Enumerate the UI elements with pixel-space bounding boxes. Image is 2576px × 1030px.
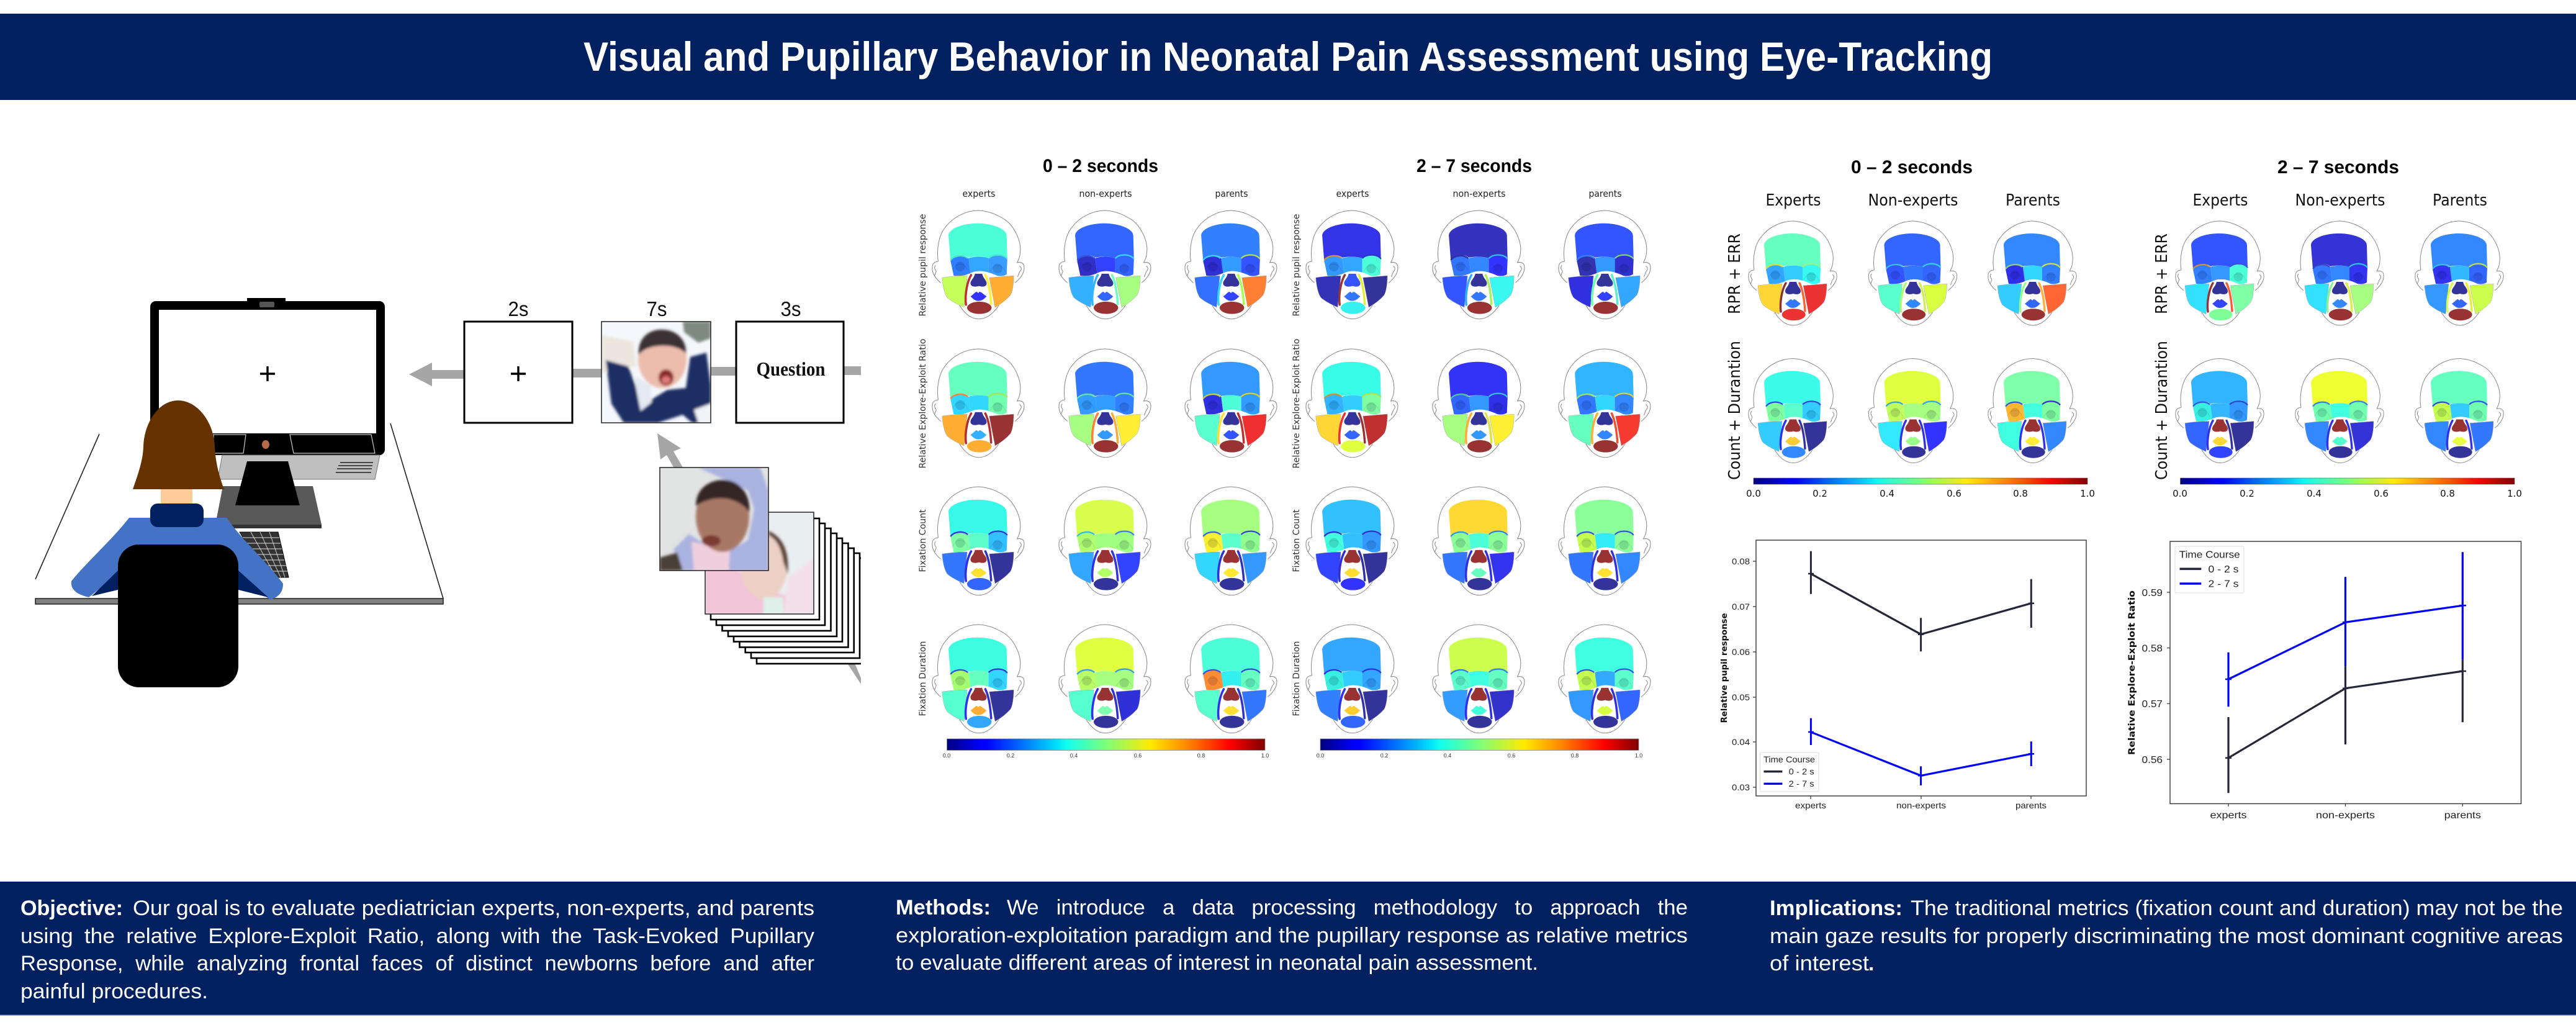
- x tick labels: [1795, 800, 2047, 810]
- legend: [2175, 546, 2244, 593]
- row labels: Relative pupil response: [1292, 214, 1302, 317]
- colorbar: [2173, 478, 2522, 499]
- title banner: Visual and Pupillary Behavior in Neonatal Pain Assessment using Eye-Tracking: [583, 34, 1993, 79]
- colorbar: 0.0: [1746, 488, 1761, 499]
- heading: 2 – 7 seconds: [1416, 156, 1532, 176]
- row labels: [1292, 214, 1302, 716]
- text block: objective: painful procedures.: [20, 980, 208, 1003]
- colorbar: 0.4: [1070, 752, 1078, 759]
- face: experts fixation duration: [1306, 625, 1398, 733]
- x tick labels: [2210, 810, 2481, 821]
- colorbar: 0.6: [1947, 488, 1961, 499]
- x tick labels: parents: [2444, 810, 2481, 821]
- y axis label: Relative pupil response: [1720, 613, 1729, 723]
- keyboard: [240, 532, 289, 577]
- row labels: RPR + ERR: [1726, 233, 1744, 314]
- column labels: parents: [1215, 188, 1248, 199]
- legend: [1760, 752, 1819, 792]
- text block: objective: Our goal is to evaluate pediatrician experts, non-experts, and parents: [133, 897, 814, 920]
- face: parents fixation duration: [1185, 625, 1277, 733]
- row labels: Count + Durantion: [2153, 341, 2171, 480]
- colorbar: 0.6: [2374, 488, 2389, 499]
- row labels: [918, 214, 928, 716]
- timeline box: 2s fixation: 2s: [508, 297, 529, 320]
- row labels: Relative pupil response: [918, 214, 928, 317]
- panel: stimulus timeline: [409, 297, 865, 684]
- image stack of newborn photographs: [660, 468, 865, 664]
- column labels: Parents: [2433, 191, 2487, 210]
- column labels: Experts: [2192, 191, 2248, 210]
- y axis label: Relative Explore-Exploit Ratio: [2127, 590, 2137, 755]
- panel: eye-tracking experimental setup: [35, 298, 443, 687]
- panel: AOI heatmaps 2-7 seconds (all metrics): [1292, 156, 1651, 759]
- title banner: [0, 14, 2576, 100]
- column labels: non-experts: [1079, 188, 1132, 199]
- face: experts count+duration: [2176, 359, 2264, 463]
- colorbar: 0.2: [1813, 488, 1827, 499]
- face: parents fixation duration: [1559, 625, 1651, 733]
- y ticks: 0.58: [2141, 643, 2163, 654]
- face: non-experts fixation count: [1059, 487, 1151, 595]
- face: experts count+duration: [1749, 359, 1837, 463]
- heading: 0 – 2 seconds: [1851, 157, 1973, 178]
- series: 2-7 s: [2225, 552, 2466, 707]
- column labels: [1336, 188, 1622, 199]
- legend: 2 - 7 s: [1789, 779, 1814, 788]
- legend: 2 - 7 s: [2209, 579, 2238, 590]
- text block: objective: Objective:: [20, 897, 123, 920]
- timeline box: 3s question: 3s: [781, 297, 801, 320]
- row labels: Relative Explore-Exploit Ratio: [918, 339, 928, 468]
- face: experts fixation count: [1306, 487, 1398, 595]
- colorbar: [1317, 739, 1642, 759]
- colorbar: 0.4: [1444, 752, 1451, 759]
- row labels: Fixation Duration: [918, 641, 928, 716]
- y ticks: 0.04: [1732, 737, 1750, 747]
- face: experts explore-exploit: [1306, 349, 1398, 458]
- text block: implications: [1770, 897, 2563, 975]
- column labels: experts: [1336, 188, 1369, 199]
- row labels: Fixation Duration: [1292, 641, 1302, 716]
- y ticks: 0.05: [1732, 692, 1750, 702]
- monitor: [150, 298, 385, 528]
- row labels: Relative Explore-Exploit Ratio: [1292, 339, 1302, 468]
- timeline box: 3s question: [736, 297, 844, 423]
- face: non-experts RPR+ERR: [2295, 221, 2384, 325]
- face: experts pupil response: [932, 210, 1024, 319]
- colorbar: 0.2: [1380, 752, 1388, 759]
- y ticks: 0.56: [2141, 755, 2163, 766]
- face: parents fixation count: [1559, 487, 1651, 595]
- text block: methods: [896, 896, 1688, 975]
- column labels: non-experts: [1452, 188, 1506, 199]
- column labels: Non-experts: [2295, 191, 2385, 210]
- text block: methods: exploration-exploitation paradigm and the pupillary response as relative metrics: [896, 924, 1688, 947]
- face: non-experts fixation count: [1433, 487, 1524, 595]
- face: experts fixation duration: [932, 625, 1024, 733]
- text block: objective: [20, 897, 814, 1003]
- colorbar: 0.8: [1571, 752, 1578, 759]
- series: 0-2 s: [2225, 660, 2466, 793]
- x tick labels: non-experts: [1896, 800, 1946, 810]
- column labels: Parents: [2006, 191, 2060, 210]
- colorbar: 0.0: [2173, 488, 2187, 499]
- face: non-experts pupil response: [1433, 210, 1524, 319]
- legend: 0 - 2 s: [1789, 766, 1814, 776]
- colorbar: 0.6: [1508, 752, 1515, 759]
- timeline box: 7s newborn photo: 7s: [647, 297, 667, 320]
- face: parents pupil response: [1559, 210, 1651, 319]
- heading: 0 – 2 seconds: [1043, 156, 1158, 176]
- face: non-experts pupil response: [1059, 210, 1151, 319]
- table: [35, 423, 443, 604]
- colorbar: 0.4: [2307, 488, 2322, 499]
- photo: crying newborn in purple blanket: [660, 468, 768, 571]
- colorbar: 0.0: [943, 752, 950, 759]
- row labels: RPR + ERR: [2153, 233, 2171, 314]
- face: non-experts fixation duration: [1059, 625, 1151, 733]
- face: experts pupil response: [1306, 210, 1398, 319]
- y ticks: 0.59: [2141, 588, 2163, 599]
- text block: objective: Response, while analyzing frontal faces of distinct newborns before and after: [20, 952, 814, 975]
- x tick labels: experts: [2210, 810, 2247, 821]
- colorbar: 1.0: [1635, 752, 1642, 759]
- face: non-experts count+duration: [2295, 359, 2384, 463]
- text block: methods: to evaluate different areas of interest in neonatal pain assessment.: [896, 951, 1538, 975]
- colorbar: 1.0: [2080, 488, 2095, 499]
- colorbar: [943, 739, 1269, 759]
- y ticks: 0.08: [1732, 556, 1750, 566]
- heading: 2 – 7 seconds: [2277, 157, 2399, 178]
- colorbar: 0.8: [2013, 488, 2028, 499]
- column labels: Experts: [1765, 191, 1821, 210]
- colorbar: 0.2: [1007, 752, 1014, 759]
- text block: methods: We introduce a data processing methodology to approach the: [1007, 896, 1688, 919]
- row labels: [1726, 233, 1744, 480]
- face: parents pupil response: [1185, 210, 1277, 319]
- arrow: image stack to stimulus: [657, 433, 861, 684]
- colorbar: [1746, 478, 2095, 499]
- y ticks: 0.03: [1732, 782, 1750, 792]
- text block: implications: main gaze results for properly discriminating the most dominant cognitive areas: [1770, 924, 2563, 948]
- line chart: relative pupil response: [1720, 540, 2086, 810]
- row labels: Fixation Count: [918, 509, 928, 572]
- colorbar: 1.0: [2507, 488, 2522, 499]
- face: experts explore-exploit: [932, 349, 1024, 458]
- column labels: experts: [962, 188, 996, 199]
- colorbar: 0.0: [1317, 752, 1324, 759]
- text block: methods: Methods:: [896, 896, 991, 919]
- legend: 0 - 2 s: [2209, 564, 2238, 575]
- row labels: [2153, 233, 2171, 480]
- colorbar: 0.4: [1880, 488, 1894, 499]
- legend: Time Course: [2179, 550, 2240, 560]
- column labels: [2192, 191, 2487, 210]
- legend: Time Course: [1763, 754, 1815, 764]
- row labels: Fixation Count: [1292, 509, 1302, 572]
- face: parents explore-exploit: [1559, 349, 1651, 458]
- colorbar: 0.6: [1134, 752, 1142, 759]
- face: experts RPR+ERR: [1749, 221, 1837, 325]
- text block: implications: Implications:: [1770, 897, 1903, 920]
- x tick labels: parents: [2015, 800, 2047, 810]
- face: non-experts RPR+ERR: [1868, 221, 1957, 325]
- column labels: Non-experts: [1868, 191, 1958, 210]
- face: parents explore-exploit: [1185, 349, 1277, 458]
- timeline box: 7s newborn photo: [601, 297, 711, 423]
- y ticks: [1732, 556, 2031, 799]
- y ticks: 0.06: [1732, 647, 1750, 657]
- bottom summary band: [0, 882, 2576, 1016]
- text block: implications: The traditional metrics (fixation count and duration) may not be the: [1911, 897, 2563, 920]
- column labels: parents: [1589, 188, 1622, 199]
- face: non-experts explore-exploit: [1059, 349, 1151, 458]
- panel: AOI heatmaps 0-2 seconds (all metrics): [918, 156, 1277, 759]
- series: 0-2 s: [1808, 551, 2034, 651]
- face: parents count+duration: [2415, 359, 2503, 463]
- timeline box: 2s fixation: [464, 297, 572, 423]
- face: non-experts count+duration: [1868, 359, 1957, 463]
- photo: newborn in pink blanket: [705, 512, 814, 614]
- person seen from behind: [71, 400, 283, 687]
- colorbar: 1.0: [1261, 752, 1269, 759]
- face: parents RPR+ERR: [2415, 221, 2503, 325]
- arrow: timeline flowing left: [409, 363, 861, 386]
- column labels: [1765, 191, 2060, 210]
- series: 2-7 s: [1808, 718, 2034, 785]
- text block: objective: using the relative Explore-Exploit Ratio, along with the Task-Evoked Pupillary: [20, 924, 814, 948]
- face: experts fixation count: [932, 487, 1024, 595]
- y ticks: 0.07: [1732, 602, 1750, 612]
- row labels: Count + Durantion: [1726, 341, 1744, 480]
- face: non-experts fixation duration: [1433, 625, 1524, 733]
- y ticks: 0.57: [2141, 699, 2163, 710]
- text block: implications: of interest: [1770, 952, 1870, 975]
- timeline box: 3s question: Question: [756, 358, 826, 380]
- y ticks: [2141, 588, 2462, 806]
- colorbar: 0.8: [1197, 752, 1205, 759]
- line chart: relative explore-exploit ratio: [2127, 541, 2521, 821]
- fixation cross on screen: [260, 366, 275, 381]
- colorbar: 0.2: [2240, 488, 2254, 499]
- x tick labels: non-experts: [2316, 810, 2375, 821]
- x tick labels: experts: [1795, 800, 1826, 810]
- face: parents RPR+ERR: [1988, 221, 2076, 325]
- face: non-experts explore-exploit: [1433, 349, 1524, 458]
- panel: combined heatmaps 2-7 seconds: [2153, 157, 2522, 499]
- face: experts RPR+ERR: [2176, 221, 2264, 325]
- text block: implications: .: [1868, 952, 1874, 975]
- colorbar: 0.8: [2440, 488, 2455, 499]
- panel: combined heatmaps 0-2 seconds: [1726, 157, 2095, 499]
- face: parents count+duration: [1988, 359, 2076, 463]
- face: parents fixation count: [1185, 487, 1277, 595]
- column labels: [962, 188, 1248, 199]
